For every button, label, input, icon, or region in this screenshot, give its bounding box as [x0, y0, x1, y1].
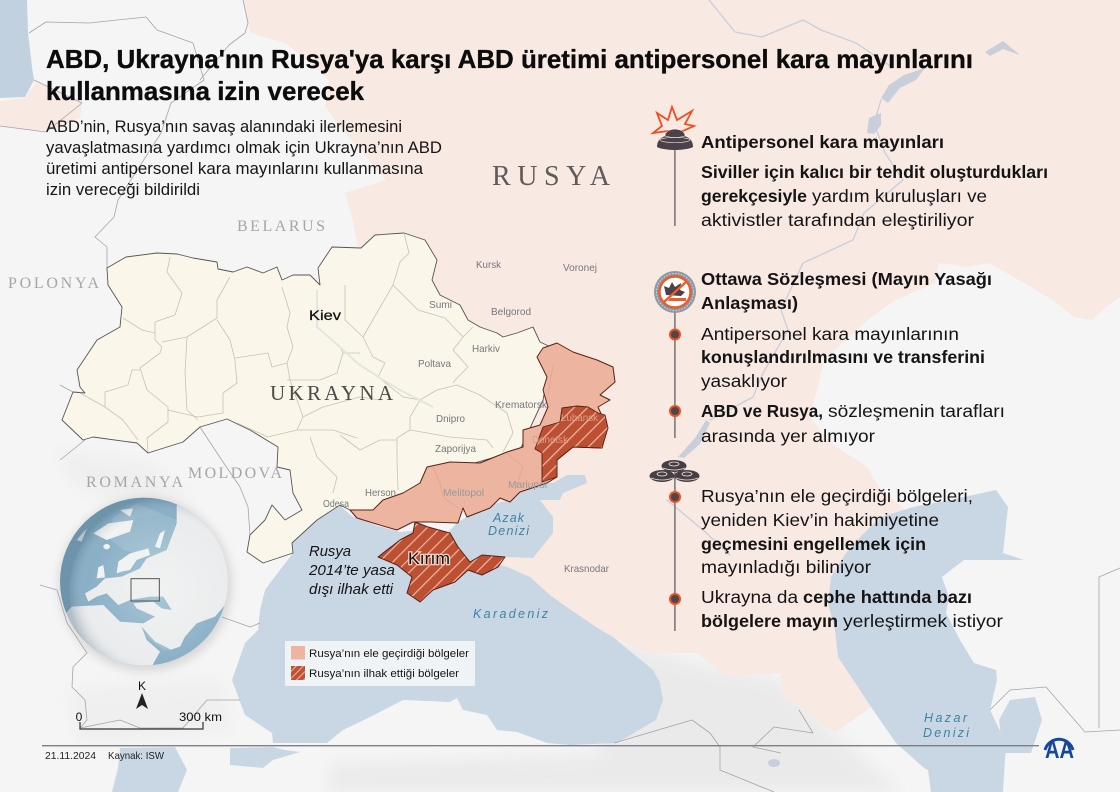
map labels: countries	[8, 161, 611, 491]
Russia territory	[243, 0, 1120, 733]
text block: Ottawa Convention: yasaklıyor	[701, 371, 787, 391]
text block: Ottawa Convention: Antipersonel kara mayınlarının	[701, 324, 959, 344]
text block: anti-personnel mines: gerekçesiyle	[701, 186, 807, 206]
Iceland	[103, 544, 110, 549]
map labels: countries: UKRAYNA	[270, 381, 394, 405]
map labels: cities: Poltava	[418, 358, 451, 370]
map labels: cities: Krasnodar	[564, 563, 609, 575]
scale bar: 300 km	[179, 710, 222, 724]
legend: Rusya’nın ele geçirdiği bölgeler	[309, 648, 469, 660]
text block: mine use: Ukrayna da	[701, 587, 798, 607]
logo: AA: AA	[1045, 736, 1074, 764]
subtitle	[46, 118, 442, 199]
locator box	[131, 579, 159, 601]
map: occupied regions	[350, 343, 615, 602]
title	[46, 44, 973, 106]
map labels: seas: Hazar	[924, 711, 968, 725]
map labels: cities: Harkiv	[472, 343, 501, 355]
annexed Donetsk and Luhansk	[535, 406, 608, 482]
map labels: cities: Sumi	[429, 299, 452, 311]
Sea of Azov	[440, 475, 587, 562]
map labels: cities: Zaporijya	[435, 443, 476, 455]
map labels: cities	[309, 259, 609, 575]
text block: mine use: yerleştirmek istiyor	[843, 611, 1003, 631]
Garabogaz gulf	[999, 697, 1042, 753]
map labels: cities: Odesa	[323, 498, 349, 510]
subtitle: ABD’nin, Rusya’nın savaş alanındaki ilerlemesini	[46, 118, 402, 136]
text block: Ottawa Convention: Anlaşması)	[701, 293, 798, 313]
map labels: cities: Voronej	[563, 262, 597, 274]
legend	[285, 641, 475, 686]
map labels: countries: ROMANYA	[86, 474, 183, 491]
date and source	[45, 750, 164, 762]
scale bar	[76, 710, 222, 729]
oblast borders	[80, 233, 513, 493]
text block: mine use: yeniden Kiev’in hakimiyetine	[701, 510, 939, 530]
terrain shading	[60, 450, 900, 792]
map labels: cities: Dnipro	[436, 413, 465, 425]
Caspian Sea	[828, 490, 1024, 792]
lighter ocean cover over Russia	[107, 503, 177, 557]
Greenland	[93, 520, 133, 540]
map: Ukraine	[62, 233, 553, 563]
map labels: cities: Mariupol	[508, 479, 547, 491]
date and source: 21.11.2024	[45, 750, 96, 762]
subtitle: yavaşlatmasına yardımcı olmak için Ukrayna’nın ABD	[46, 139, 442, 157]
north arrow: K	[138, 679, 146, 693]
text block: anti-personnel mines: Antipersonel kara mayınları	[701, 132, 944, 152]
title: kullanmasına izin verecek	[46, 76, 365, 106]
Eurasia and Africa land	[60, 503, 233, 667]
Scandinavia	[117, 548, 150, 573]
footer rule	[42, 745, 1039, 746]
legend: Rusya’nın ilhak ettiği bölgeler	[309, 668, 459, 680]
icon: stacked mines	[650, 460, 700, 482]
subtitle: üretimi antipersonel kara mayınlarını kullanmasına	[46, 160, 424, 178]
annexation note	[308, 543, 395, 598]
text block: Ottawa Convention: konuşlandırılmasını ve transferini	[701, 347, 985, 367]
icon: exploding mine	[653, 107, 694, 150]
north arrow	[136, 679, 148, 709]
map labels: seas: Denizi	[488, 524, 530, 538]
text block: mine use	[701, 486, 1003, 631]
map labels: countries: MOLDOVA	[188, 465, 282, 482]
subtitle: izin vereceği bildirildi	[46, 181, 200, 199]
text block: Ottawa Convention: Ottawa Sözleşmesi (Mayın Yasağı	[701, 269, 992, 289]
annexation note: dışı ilhak etti	[309, 581, 394, 598]
text block: mine use: geçmesini engellemek için	[701, 534, 926, 554]
annexed Crimea	[378, 522, 505, 602]
lakes and rivers	[678, 41, 1020, 767]
map labels: seas: Denizi	[923, 726, 970, 740]
map labels: cities: Kiev	[309, 307, 341, 323]
Persian Gulf	[142, 627, 172, 650]
text block: anti-personnel mines: aktivistler tarafından eleştiriliyor	[701, 210, 974, 230]
annexation note: Rusya	[309, 543, 351, 560]
text block: anti-personnel mines: yardım kuruluşları ve	[812, 186, 987, 206]
map labels: cities: Melitopol	[443, 487, 484, 499]
map labels: cities: Donetsk	[532, 434, 569, 446]
annexation note: 2014’te yasa	[308, 562, 395, 579]
Aegean Sea	[112, 747, 187, 792]
map labels: cities: Herson	[365, 487, 396, 499]
Arctic islands	[77, 508, 165, 548]
map labels: countries: BELARUS	[237, 218, 325, 235]
text block: Ottawa Convention: arasında yer almıyor	[701, 426, 875, 446]
text block: Ottawa Convention: sözleşmenin tarafları	[828, 401, 1005, 421]
icon: Ottawa Convention seal	[654, 271, 696, 313]
text block: anti-personnel mines: Siviller için kalıcı bir tehdit oluşturdukları	[701, 162, 1048, 182]
Black Sea	[232, 506, 663, 745]
locator globe	[59, 498, 233, 671]
map labels: cities: Luhansk	[561, 412, 599, 424]
Baltic Sea	[0, 0, 34, 98]
label: Kırım: Kırım	[408, 549, 450, 568]
text block: mine use: cephe hattında bazı	[803, 587, 972, 607]
Arabia	[150, 627, 183, 647]
map labels: seas: Azak	[492, 511, 525, 525]
map labels: seas: Karadeniz	[473, 607, 549, 621]
Britain	[97, 565, 105, 578]
title: ABD, Ukrayna'nın Rusya'ya karşı ABD üretimi antipersonel kara mayınlarını	[46, 44, 973, 74]
text block: anti-personnel mines	[701, 132, 1048, 230]
map labels: cities: Belgorod	[491, 306, 531, 318]
text block: Ottawa Convention	[701, 269, 1005, 446]
timeline bullets	[670, 330, 680, 604]
date and source: Kaynak: ISW	[108, 750, 164, 762]
text block: mine use: Rusya’nın ele geçirdiği bölgeleri,	[701, 486, 973, 506]
map labels: seas	[473, 511, 970, 740]
scale bar: 0	[76, 710, 83, 724]
timeline lines	[674, 147, 676, 631]
text block: mine use: mayınladığı biliniyor	[701, 557, 871, 577]
Kaliningrad	[0, 82, 82, 132]
map labels: countries: POLONYA	[8, 275, 99, 292]
map labels: countries: RUSYA	[492, 161, 611, 192]
text block: mine use: bölgelere mayın	[701, 611, 838, 631]
map labels: cities: Kursk	[476, 259, 502, 271]
text block: Ottawa Convention: ABD ve Rusya,	[701, 401, 823, 421]
Marmara Sea	[230, 747, 300, 768]
map labels: cities: Krematorsk	[495, 399, 548, 411]
